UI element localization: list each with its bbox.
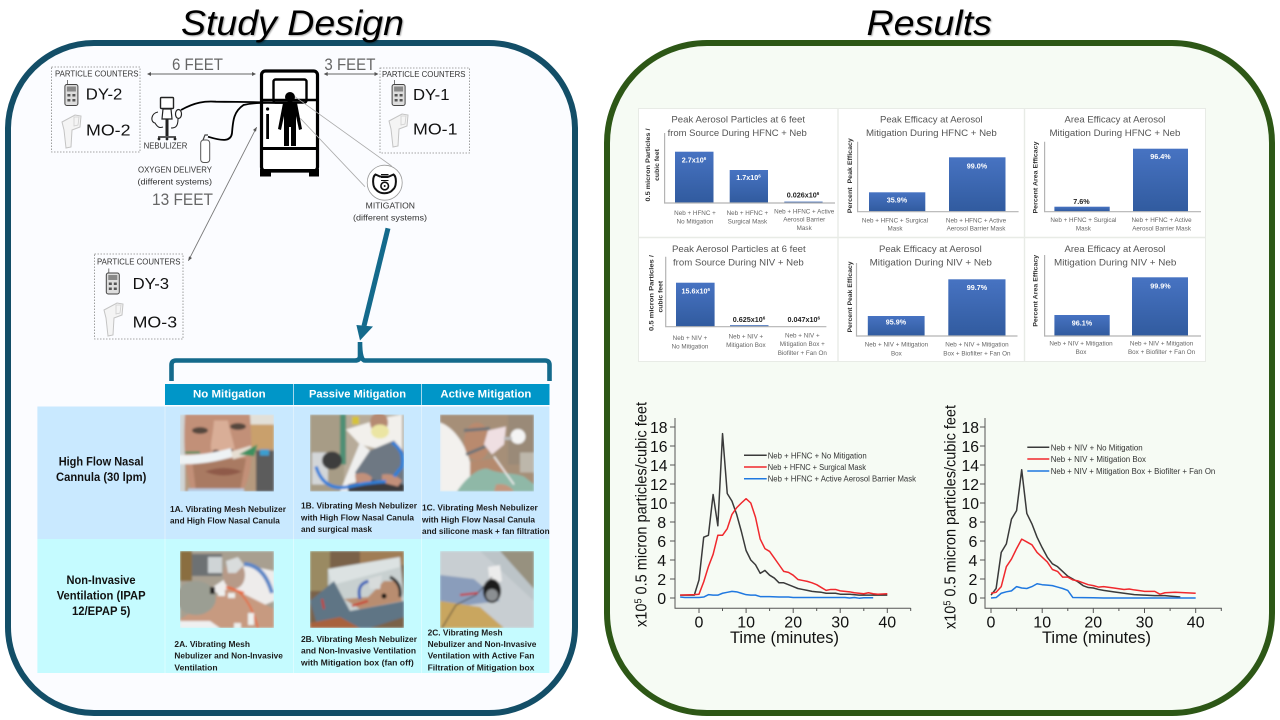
bar chart: peak aerosol NIV: 15.6x10 — [682, 286, 708, 295]
bar chart: peak efficacy NIV: 95.9% — [886, 317, 907, 326]
bar chart: peak efficacy NIV: 99.7% — [967, 283, 988, 292]
caption 2B line 3: with Mitigation box (fan off) — [300, 658, 414, 667]
bar chart: area efficacy HFNC: Aerosol Barrier Mask — [1132, 225, 1192, 232]
y axis title: x10 — [943, 603, 960, 629]
bar chart: peak aerosol HFNC: Neb + HFNC + — [727, 210, 769, 217]
bar chart: peak aerosol HFNC: Aerosol Barrier — [783, 217, 825, 224]
bar chart: area efficacy HFNC: Mitigation During HFNC + Neb — [1050, 127, 1180, 138]
counter group DY-1 / MO-1: DY-1 — [413, 87, 450, 104]
legend: Neb + NIV + Mitigation Box — [1051, 455, 1146, 464]
y axis title: 5 — [943, 600, 954, 606]
row: non-invasive ventilation: Ventilation (IPAP — [57, 590, 146, 602]
x tick labels: 40 — [878, 614, 896, 631]
bar chart: peak aerosol HFNC: Mask — [797, 225, 813, 232]
axes — [985, 418, 1222, 608]
bar chart: peak efficacy HFNC: Neb + HFNC + Surgical — [862, 217, 928, 224]
y tick labels — [962, 420, 979, 608]
icon: oxygen tank — [138, 135, 213, 187]
bar chart: peak aerosol NIV: Neb + NIV + — [673, 335, 708, 342]
tubing — [181, 102, 285, 140]
bar chart: peak aerosol NIV: Biofilter + Fan On — [778, 350, 827, 357]
icon: oxygen tank: (different systems) — [138, 178, 212, 187]
bar chart: area efficacy NIV: 99.9% — [1150, 281, 1171, 290]
bar chart: peak aerosol NIV: 0.5 micron Particles / — [648, 255, 656, 331]
caption 2C line 3: Ventilation with Active Fan — [428, 652, 535, 661]
y tick labels: 2 — [968, 572, 978, 589]
bar chart: peak efficacy HFNC: Aerosol Barrier Mask — [947, 226, 1006, 233]
y axis title: x10 — [634, 601, 651, 627]
counter group DY-2 / MO-2: DY-2 — [86, 86, 122, 103]
line chart: NIV — [943, 404, 1222, 647]
icon: oxygen tank: OXYGEN DELIVERY — [138, 166, 213, 175]
row: high flow nasal cannula: High Flow Nasal — [59, 456, 144, 468]
bar chart: area efficacy HFNC: Area Efficacy at Aerosol — [1064, 114, 1165, 125]
y tick labels: 0 — [657, 591, 666, 608]
y axis title: 5 — [634, 598, 645, 604]
counter group DY-3 / MO-3 — [94, 254, 183, 339]
bar chart: peak efficacy HFNC: Mitigation During HFNC + Neb — [866, 127, 997, 138]
x tick labels: 10 — [1033, 614, 1051, 631]
y tick labels: 2 — [657, 572, 666, 589]
row: non-invasive ventilation: 12/EPAP 5) — [72, 606, 131, 618]
caption 1C: 1C. Vibrating Mesh Nebulizer — [422, 504, 538, 513]
y tick labels: 12 — [650, 477, 668, 494]
row: high flow nasal cannula — [37, 406, 550, 539]
arrow: 13 feet — [152, 127, 257, 261]
bar chart: area efficacy HFNC — [1032, 114, 1201, 232]
y tick labels: 18 — [650, 420, 668, 437]
bar chart: peak aerosol NIV: 0.047x10 — [788, 315, 818, 324]
bar chart: peak efficacy NIV: Mitigation During NIV + Neb — [870, 256, 992, 267]
bar chart: peak aerosol HFNC: 6 — [758, 174, 761, 178]
bar chart: peak aerosol HFNC: cubic feet — [654, 148, 661, 181]
caption 1B: 1B. Vibrating Mesh Nebulizer — [301, 502, 417, 511]
row: non-invasive ventilation — [37, 539, 549, 673]
mitigation table — [37, 384, 550, 673]
photo 1C — [440, 414, 534, 492]
bar chart: peak efficacy NIV: Neb + NIV + Mitigation — [945, 342, 1009, 349]
bar chart: area efficacy HFNC: Neb + HFNC + Active — [1131, 217, 1192, 224]
x tick labels: 10 — [737, 614, 755, 631]
bar chart: peak efficacy HFNC: 35.9% — [887, 196, 908, 205]
legend: Neb + NIV + No Mitigation — [1051, 443, 1143, 452]
bar chart: area efficacy NIV: 96.1% — [1072, 319, 1093, 328]
table header: Passive Mitigation — [309, 389, 406, 401]
legend — [744, 451, 917, 484]
bar chart: peak aerosol NIV: No Mitigation — [672, 344, 709, 351]
y tick labels: 10 — [650, 496, 668, 513]
icon: nebulizer — [144, 98, 188, 150]
x tick labels: 0 — [695, 614, 704, 631]
y tick labels: 4 — [657, 553, 666, 570]
bar chart: area efficacy HFNC: Neb + HFNC + Surgical — [1050, 217, 1116, 224]
icon: mitigation mask: MITIGATION — [366, 201, 415, 210]
y tick labels: 18 — [962, 420, 979, 437]
caption 1C line 3: and silicone mask + fan filtration — [422, 527, 550, 536]
bar chart: peak efficacy NIV: Percent Peak Efficacy — [847, 261, 854, 332]
caption 1A: 1A. Vibrating Mesh Nebulizer — [170, 505, 286, 514]
caption 2C: 2C. Vibrating Mesh — [428, 628, 503, 637]
arrow: mitigation to table — [356, 228, 388, 340]
counter group DY-1 / MO-1: PARTICLE COUNTERS — [382, 70, 466, 79]
y axis title: 0.5 micron particles/cubic feet — [943, 404, 960, 601]
x tick labels: 30 — [831, 614, 849, 631]
axis titles: Time (minutes) — [1042, 628, 1151, 647]
photo 1B — [310, 412, 404, 492]
bar chart: area efficacy HFNC: 96.4% — [1150, 152, 1171, 161]
bar chart: peak efficacy HFNC: Peak Efficacy at Aerosol — [880, 114, 982, 125]
caption 2A: 2A. Vibrating Mesh — [174, 640, 250, 649]
counter group DY-1 / MO-1: MO-1 — [413, 122, 458, 139]
bar chart: peak aerosol NIV: 6 — [818, 316, 821, 320]
bar chart: peak efficacy HFNC: Percent Peak Efficacy — [847, 138, 854, 213]
bar chart: peak aerosol HFNC: from Source During HFNC + Neb — [668, 127, 807, 138]
photo 2C — [440, 551, 534, 628]
photo 2A — [176, 551, 274, 628]
caption 1B line 3: and surgical mask — [301, 525, 373, 534]
bar chart: peak aerosol NIV: Mitigation Box + — [780, 341, 825, 348]
caption 1A line 2: and High Flow Nasal Canula — [170, 517, 280, 526]
y tick labels: 6 — [968, 534, 978, 551]
caption 1C line 2: with High Flow Nasal Canula — [421, 515, 536, 524]
line chart: HFNC — [634, 401, 917, 647]
y tick labels: 4 — [968, 553, 978, 570]
y tick labels: 0 — [968, 591, 978, 608]
y tick labels: 12 — [962, 477, 979, 494]
y tick labels: 14 — [650, 458, 668, 475]
legend — [1027, 443, 1215, 476]
bar chart: peak aerosol NIV: 6 — [763, 316, 766, 320]
y tick labels: 16 — [962, 439, 979, 456]
x tick labels: 20 — [784, 614, 802, 631]
y tick labels: 6 — [657, 534, 666, 551]
bar chart: peak efficacy NIV: Neb + NIV + Mitigation — [865, 342, 929, 349]
table header: Active Mitigation — [440, 389, 532, 401]
counter group DY-2 / MO-2: PARTICLE COUNTERS — [55, 70, 138, 79]
caption 2A line 3: Ventilation — [174, 663, 218, 672]
bar chart: peak efficacy NIV: Box — [891, 350, 903, 357]
counter group DY-1 / MO-1 — [380, 68, 470, 153]
bar chart: peak aerosol HFNC: Neb + HFNC + — [674, 210, 716, 217]
counter group DY-3 / MO-3: PARTICLE COUNTERS — [97, 258, 180, 266]
caption 2A line 2: Nebulizer and Non-Invasive — [174, 652, 283, 661]
y tick labels: 14 — [962, 458, 979, 475]
x tick labels: 30 — [1136, 614, 1154, 631]
axis titles: Time (minutes) — [730, 628, 839, 647]
legend: Neb + HFNC + Surgical Mask — [768, 463, 867, 472]
study setup diagram — [52, 55, 470, 339]
bar chart: peak aerosol NIV — [648, 243, 827, 357]
arrow: 3 feet: 3 FEET — [324, 55, 375, 74]
bar chart: peak efficacy HFNC: Neb + HFNC + Active — [946, 217, 1007, 224]
icon: hospital bed with patient — [260, 71, 319, 176]
bar chart: peak efficacy HFNC — [847, 114, 1019, 233]
y tick labels: 10 — [962, 496, 979, 513]
caption 1B line 2: with High Flow Nasal Canula — [300, 513, 415, 522]
bar chart: peak aerosol HFNC: Peak Aerosol Particles at 6 feet — [671, 114, 805, 125]
bar chart: area efficacy NIV: Box + Biofilter + Fan On — [1128, 349, 1196, 356]
x tick labels — [987, 614, 1205, 631]
legend: Neb + HFNC + Active Aerosol Barrier Mask — [768, 475, 917, 484]
bar chart: peak aerosol NIV: Neb + NIV + — [729, 333, 764, 340]
caption 2B: 2B. Vibrating Mesh Nebulizer — [301, 635, 417, 644]
x tick labels — [695, 614, 896, 631]
legend: Neb + NIV + Mitigation Box + Biofilter + Fan On — [1051, 467, 1215, 476]
bar chart: peak aerosol HFNC: 6 — [704, 156, 707, 161]
panel: study design — [8, 43, 575, 713]
bar chart: peak aerosol NIV: 0.625x10 — [733, 315, 763, 324]
x tick labels: 0 — [987, 614, 996, 631]
arrow: 6 feet: 6 FEET — [172, 55, 223, 74]
counter group DY-2 / MO-2: MO-2 — [86, 122, 131, 139]
caption 2C line 2: Nebulizer and Non-Invasive — [428, 640, 537, 649]
bar chart: area efficacy NIV — [1032, 243, 1201, 356]
bar chart: peak aerosol NIV: from Source During NIV + Neb — [673, 256, 804, 267]
bar chart: area efficacy NIV: Neb + NIV + Mitigation — [1049, 341, 1113, 348]
bar chart: peak aerosol HFNC: Surgical Mask — [728, 218, 768, 226]
counter group DY-3 / MO-3: MO-3 — [133, 315, 177, 332]
bar chart: peak aerosol HFNC: No Mitigation — [677, 219, 714, 226]
data lines — [680, 434, 887, 598]
bracket — [172, 342, 550, 381]
legend: Neb + HFNC + No Mitigation — [768, 451, 867, 460]
icon: mitigation mask: (different systems) — [353, 213, 427, 222]
bar chart grid — [638, 108, 1206, 362]
caption 2C line 4: Filtration of Mitigation box — [428, 663, 535, 672]
bar chart: peak efficacy HFNC: Mask — [887, 226, 903, 233]
bar chart: peak aerosol HFNC: 2.7x10 — [682, 155, 704, 164]
y tick labels: 8 — [657, 515, 666, 532]
bar chart: peak aerosol NIV: 6 — [708, 287, 711, 292]
bar chart: peak aerosol HFNC: 1.7x10 — [736, 173, 758, 182]
y axis title: 0.5 micron particles/cubic feet — [634, 401, 651, 598]
bar chart: peak aerosol HFNC: 0.5 micron Particles / — [645, 128, 652, 202]
bar chart: peak aerosol NIV: Neb + NIV + — [785, 332, 820, 339]
y tick labels: 8 — [968, 515, 978, 532]
bar chart: area efficacy NIV: Neb + NIV + Mitigation — [1130, 341, 1194, 348]
bar chart: area efficacy NIV: Mitigation During NIV + Neb — [1054, 256, 1176, 267]
photo 1A — [178, 414, 274, 492]
title: study design: Study Design — [181, 4, 404, 43]
y tick labels — [650, 420, 668, 608]
counter group DY-2 / MO-2 — [52, 67, 140, 152]
bar chart: peak aerosol NIV: cubic feet — [658, 280, 664, 313]
bar chart: peak efficacy NIV — [847, 243, 1018, 357]
bar chart: area efficacy NIV: Area Efficacy at Aerosol — [1064, 243, 1165, 254]
icon: mitigation mask — [295, 97, 427, 222]
counter group DY-3 / MO-3: DY-3 — [133, 276, 169, 293]
y tick labels: 16 — [650, 439, 668, 456]
x tick labels: 20 — [1084, 614, 1102, 631]
bar chart: area efficacy HFNC: Percent Area Efficacy — [1032, 141, 1040, 214]
photo 2B — [310, 551, 404, 628]
arrow: 6 feet — [147, 55, 256, 76]
panel: results — [607, 43, 1272, 713]
bar chart: peak efficacy HFNC: 99.0% — [967, 161, 988, 170]
table header — [165, 384, 550, 405]
arrow: 13 feet: 13 FEET — [152, 190, 213, 209]
bar chart: peak aerosol HFNC: 0.026x10 — [787, 190, 817, 199]
bar chart: area efficacy HFNC: Mask — [1076, 225, 1092, 232]
bar chart: area efficacy HFNC: 7.6% — [1073, 197, 1090, 206]
icon: nebulizer: NEBULIZER — [144, 141, 188, 150]
bar chart: area efficacy NIV: Box — [1076, 349, 1087, 356]
data lines — [991, 470, 1196, 598]
axes — [675, 418, 911, 608]
x tick labels: 40 — [1187, 614, 1205, 631]
bar chart: peak aerosol NIV: Peak Aerosol Particles at 6 feet — [672, 243, 806, 254]
bar chart: peak aerosol HFNC: 6 — [817, 191, 820, 196]
row: non-invasive ventilation: Non-Invasive — [66, 575, 136, 587]
bar chart: peak aerosol HFNC: Neb + HFNC + Active — [774, 208, 835, 215]
caption 2B line 2: and Non-Invasive Ventilation — [301, 647, 416, 656]
title: results: Results — [866, 4, 992, 43]
bar chart: peak efficacy NIV: Peak Efficacy at Aerosol — [879, 243, 982, 254]
bar chart: peak efficacy NIV: Box + Biofilter + Fan On — [943, 350, 1011, 357]
bar chart: peak aerosol HFNC — [645, 114, 835, 232]
bar chart: peak aerosol NIV: Mitigation Box — [726, 342, 767, 349]
table header: No Mitigation — [193, 389, 266, 401]
row: high flow nasal cannula: Cannula (30 lpm) — [56, 472, 146, 484]
bar chart: area efficacy NIV: Percent Area Efficacy — [1032, 255, 1040, 327]
